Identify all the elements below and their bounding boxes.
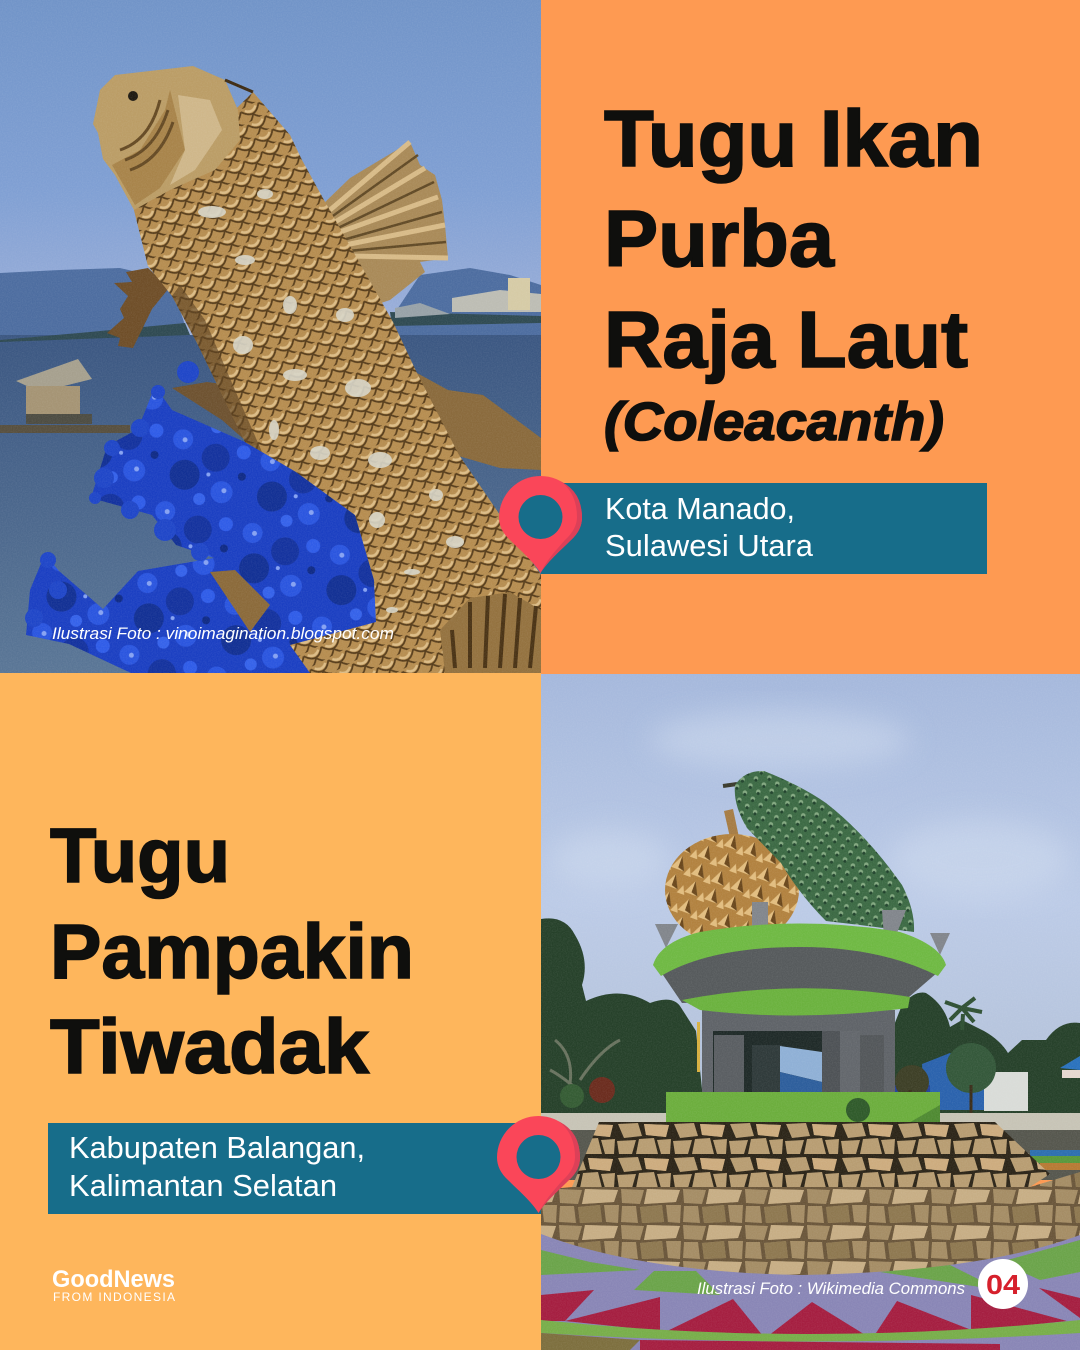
monument: top green ring bbox=[653, 924, 946, 976]
shoreline and distant buildings bbox=[0, 278, 541, 342]
location bar: Kota Manado bbox=[541, 483, 987, 574]
fish: tail fin bbox=[440, 592, 541, 673]
title: Tugu Pampakin Tiwadak: Pampakin bbox=[50, 909, 414, 995]
logo: GoodNews from Indonesia: GoodNews bbox=[52, 1266, 175, 1293]
rug ground bbox=[541, 1230, 1080, 1350]
fish: scaled body bbox=[134, 92, 541, 673]
page number badge: 04 bbox=[986, 1269, 1020, 1300]
fish: head bbox=[93, 66, 253, 210]
sky bbox=[541, 674, 1080, 1134]
fish: throat scales bbox=[134, 210, 148, 266]
sculpture: cempedak bbox=[723, 771, 914, 932]
low wall bbox=[541, 1113, 1080, 1130]
location bar: Kota Manado: Kota Manado, bbox=[605, 491, 795, 526]
sky bbox=[0, 0, 541, 340]
title: Tugu Ikan Purba Raja Laut: (Coleacanth) bbox=[604, 392, 944, 452]
sculpture: durian bbox=[665, 809, 799, 946]
distant mountains bbox=[0, 268, 541, 340]
bare branches in tree line bbox=[549, 1038, 620, 1084]
photo: coelacanth fish monument at the sea bbox=[0, 0, 541, 673]
blue wave sculpture bbox=[25, 361, 376, 673]
location bar: Kabupaten Balangan: Kabupaten Balangan, bbox=[69, 1130, 365, 1165]
monument: grey bowl bbox=[661, 945, 938, 1003]
monument: second green ring bbox=[682, 988, 910, 1016]
fish: pale scale patches bbox=[198, 189, 464, 613]
fish: lower fin bbox=[172, 382, 247, 442]
buildings with blue roofs bbox=[893, 1053, 1080, 1111]
monument: small grey posts bbox=[655, 902, 950, 955]
location bar: Kabupaten Balangan: Kalimantan Selatan bbox=[69, 1168, 337, 1203]
page number badge bbox=[978, 1259, 1028, 1309]
icon: map pin bottom bbox=[497, 1116, 580, 1213]
small foreground trees bbox=[560, 1043, 996, 1113]
stone mound lower tier bbox=[541, 1172, 1080, 1275]
clouds bbox=[550, 710, 1070, 900]
monument: lower grey structure with openings bbox=[697, 1010, 895, 1092]
location bar: Kota Manado: Sulawesi Utara bbox=[605, 528, 814, 563]
panel: orange title background bbox=[541, 0, 1080, 674]
floating hut bbox=[0, 359, 130, 433]
sea bbox=[0, 335, 541, 673]
location bar: Kabupaten Balangan bbox=[48, 1123, 541, 1214]
logo: GoodNews from Indonesia: FROM INDONESIA bbox=[53, 1290, 175, 1304]
fish: belly shadow bbox=[172, 285, 262, 452]
title: Tugu Ikan Purba Raja Laut: Tugu Ikan bbox=[604, 94, 983, 183]
title: Tugu Ikan Purba Raja Laut: Purba bbox=[604, 194, 835, 283]
title: Tugu Ikan Purba Raja Laut bbox=[604, 94, 983, 452]
photo: durian and cempedak monument bbox=[541, 674, 1080, 1350]
photo credit: Ilustrasi Foto : vinoimagination.blogspot.com bbox=[52, 624, 394, 643]
panel: yellow title background bbox=[0, 673, 541, 1350]
monument: green base bbox=[666, 1092, 940, 1122]
title: Tugu Pampakin Tiwadak: Tugu bbox=[50, 813, 230, 899]
fish: dorsal fin bbox=[321, 142, 448, 305]
title: Tugu Ikan Purba Raja Laut: Raja Laut bbox=[604, 295, 968, 384]
fish: left pectoral fin bbox=[107, 268, 169, 348]
title: Tugu Pampakin Tiwadak: Tiwadak bbox=[50, 1004, 369, 1090]
background trees bbox=[541, 918, 1080, 1118]
icon: map pin top bbox=[499, 476, 582, 573]
photo credit: Ilustrasi Foto : Wikimedia Commons bbox=[697, 1279, 965, 1298]
palm tree bbox=[945, 998, 982, 1030]
fish: rear fin bbox=[417, 373, 541, 470]
stone mound upper tier bbox=[572, 1122, 1050, 1187]
title: Tugu Pampakin Tiwadak bbox=[50, 813, 414, 1090]
